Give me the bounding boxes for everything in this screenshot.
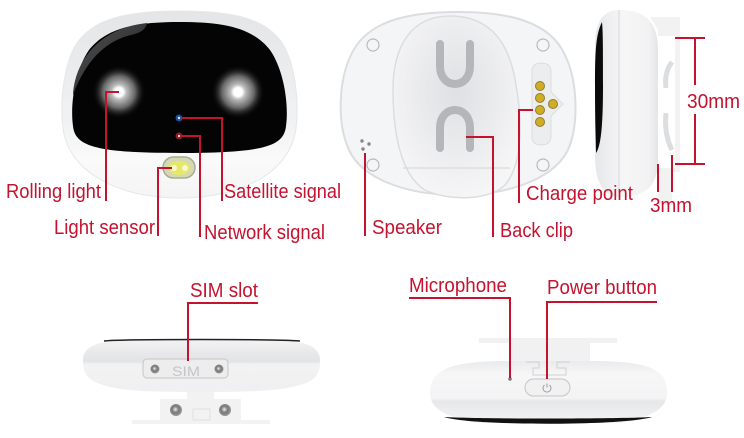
bottom edge view (power) (430, 338, 667, 424)
back view of device (341, 12, 575, 198)
mount notch (526, 362, 570, 375)
network LED (176, 132, 182, 140)
label: Charge point (519, 110, 633, 205)
mounting holes (367, 39, 549, 171)
light sensor (163, 157, 195, 178)
front view of device (62, 11, 297, 198)
label: Satellite signal (181, 118, 341, 203)
satellite LED (176, 114, 182, 122)
label: Speaker (365, 153, 442, 239)
label: Power button: Power button (547, 277, 657, 299)
label: Back clip: Back clip (500, 220, 573, 242)
SIM panel (143, 359, 228, 378)
label: Speaker: Speaker (372, 217, 442, 239)
label: Charge point: Charge point (526, 183, 633, 205)
left light (92, 65, 146, 119)
dimension: 30mm: 30mm (687, 91, 740, 113)
label: Network signal: Network signal (204, 222, 325, 244)
label: Light sensor (54, 168, 172, 239)
power button (525, 379, 570, 396)
dimension: 3mm (650, 155, 692, 217)
label: SIM slot (188, 280, 258, 361)
bottom edge view (SIM) (83, 339, 320, 424)
dimension: 3mm: 3mm (650, 195, 692, 217)
back clip (393, 16, 520, 198)
label: Rolling light: Rolling light (6, 181, 101, 203)
label: Microphone (409, 275, 510, 378)
top black edge (104, 340, 300, 341)
clip U slots (440, 44, 470, 148)
label: Satellite signal: Satellite signal (224, 181, 341, 203)
right light (211, 65, 265, 119)
label: Power button (547, 277, 657, 379)
side clip (650, 17, 680, 205)
label: Network signal (181, 136, 325, 244)
side view of device (595, 10, 680, 205)
screen glare (73, 23, 147, 95)
label: Rolling light (6, 92, 119, 203)
clip mount (132, 388, 270, 424)
dimension: 30mm (675, 38, 740, 164)
microphone hole (508, 377, 512, 381)
bottom black edge (444, 417, 652, 424)
side screen edge (595, 22, 603, 153)
label: Light sensor: Light sensor (54, 217, 155, 239)
charge point (532, 63, 563, 145)
label: Back clip (466, 137, 573, 242)
label: SIM slot: SIM slot (190, 280, 258, 302)
speaker holes (360, 139, 371, 151)
screen (72, 22, 287, 153)
SIM marking: SIM (172, 363, 200, 379)
label: Microphone: Microphone (409, 275, 507, 297)
